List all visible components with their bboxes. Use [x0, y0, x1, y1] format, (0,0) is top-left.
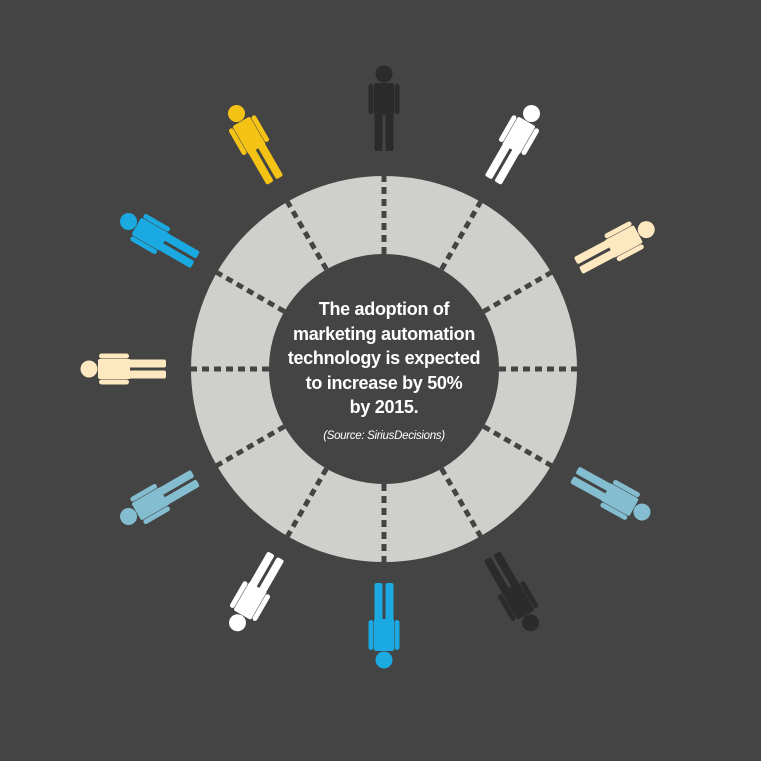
- center text: to increase by 50%: [306, 372, 462, 392]
- center text: technology is expected: [288, 348, 480, 368]
- icon: person yellow 330: [219, 98, 288, 188]
- center text: by 2015.: [350, 397, 418, 417]
- icon: person light blue 240: [113, 465, 203, 534]
- center text: The adoption of: [319, 299, 449, 319]
- icon: person black top: [368, 66, 400, 151]
- icon: person white 210: [220, 548, 289, 638]
- icon: person cream 270: [80, 354, 166, 384]
- icon: person cream 60: [571, 212, 661, 279]
- ring: [190, 175, 578, 563]
- icon: person black 150: [479, 548, 548, 638]
- center text: [288, 299, 480, 417]
- icon: person blue 180: [368, 583, 400, 668]
- source: (Source: SiriusDecisions): [323, 430, 445, 442]
- center text: marketing automation: [293, 324, 475, 344]
- icon: person white 30: [480, 98, 549, 188]
- icon: person blue 300: [113, 204, 203, 273]
- icon: person light blue 120: [567, 461, 657, 530]
